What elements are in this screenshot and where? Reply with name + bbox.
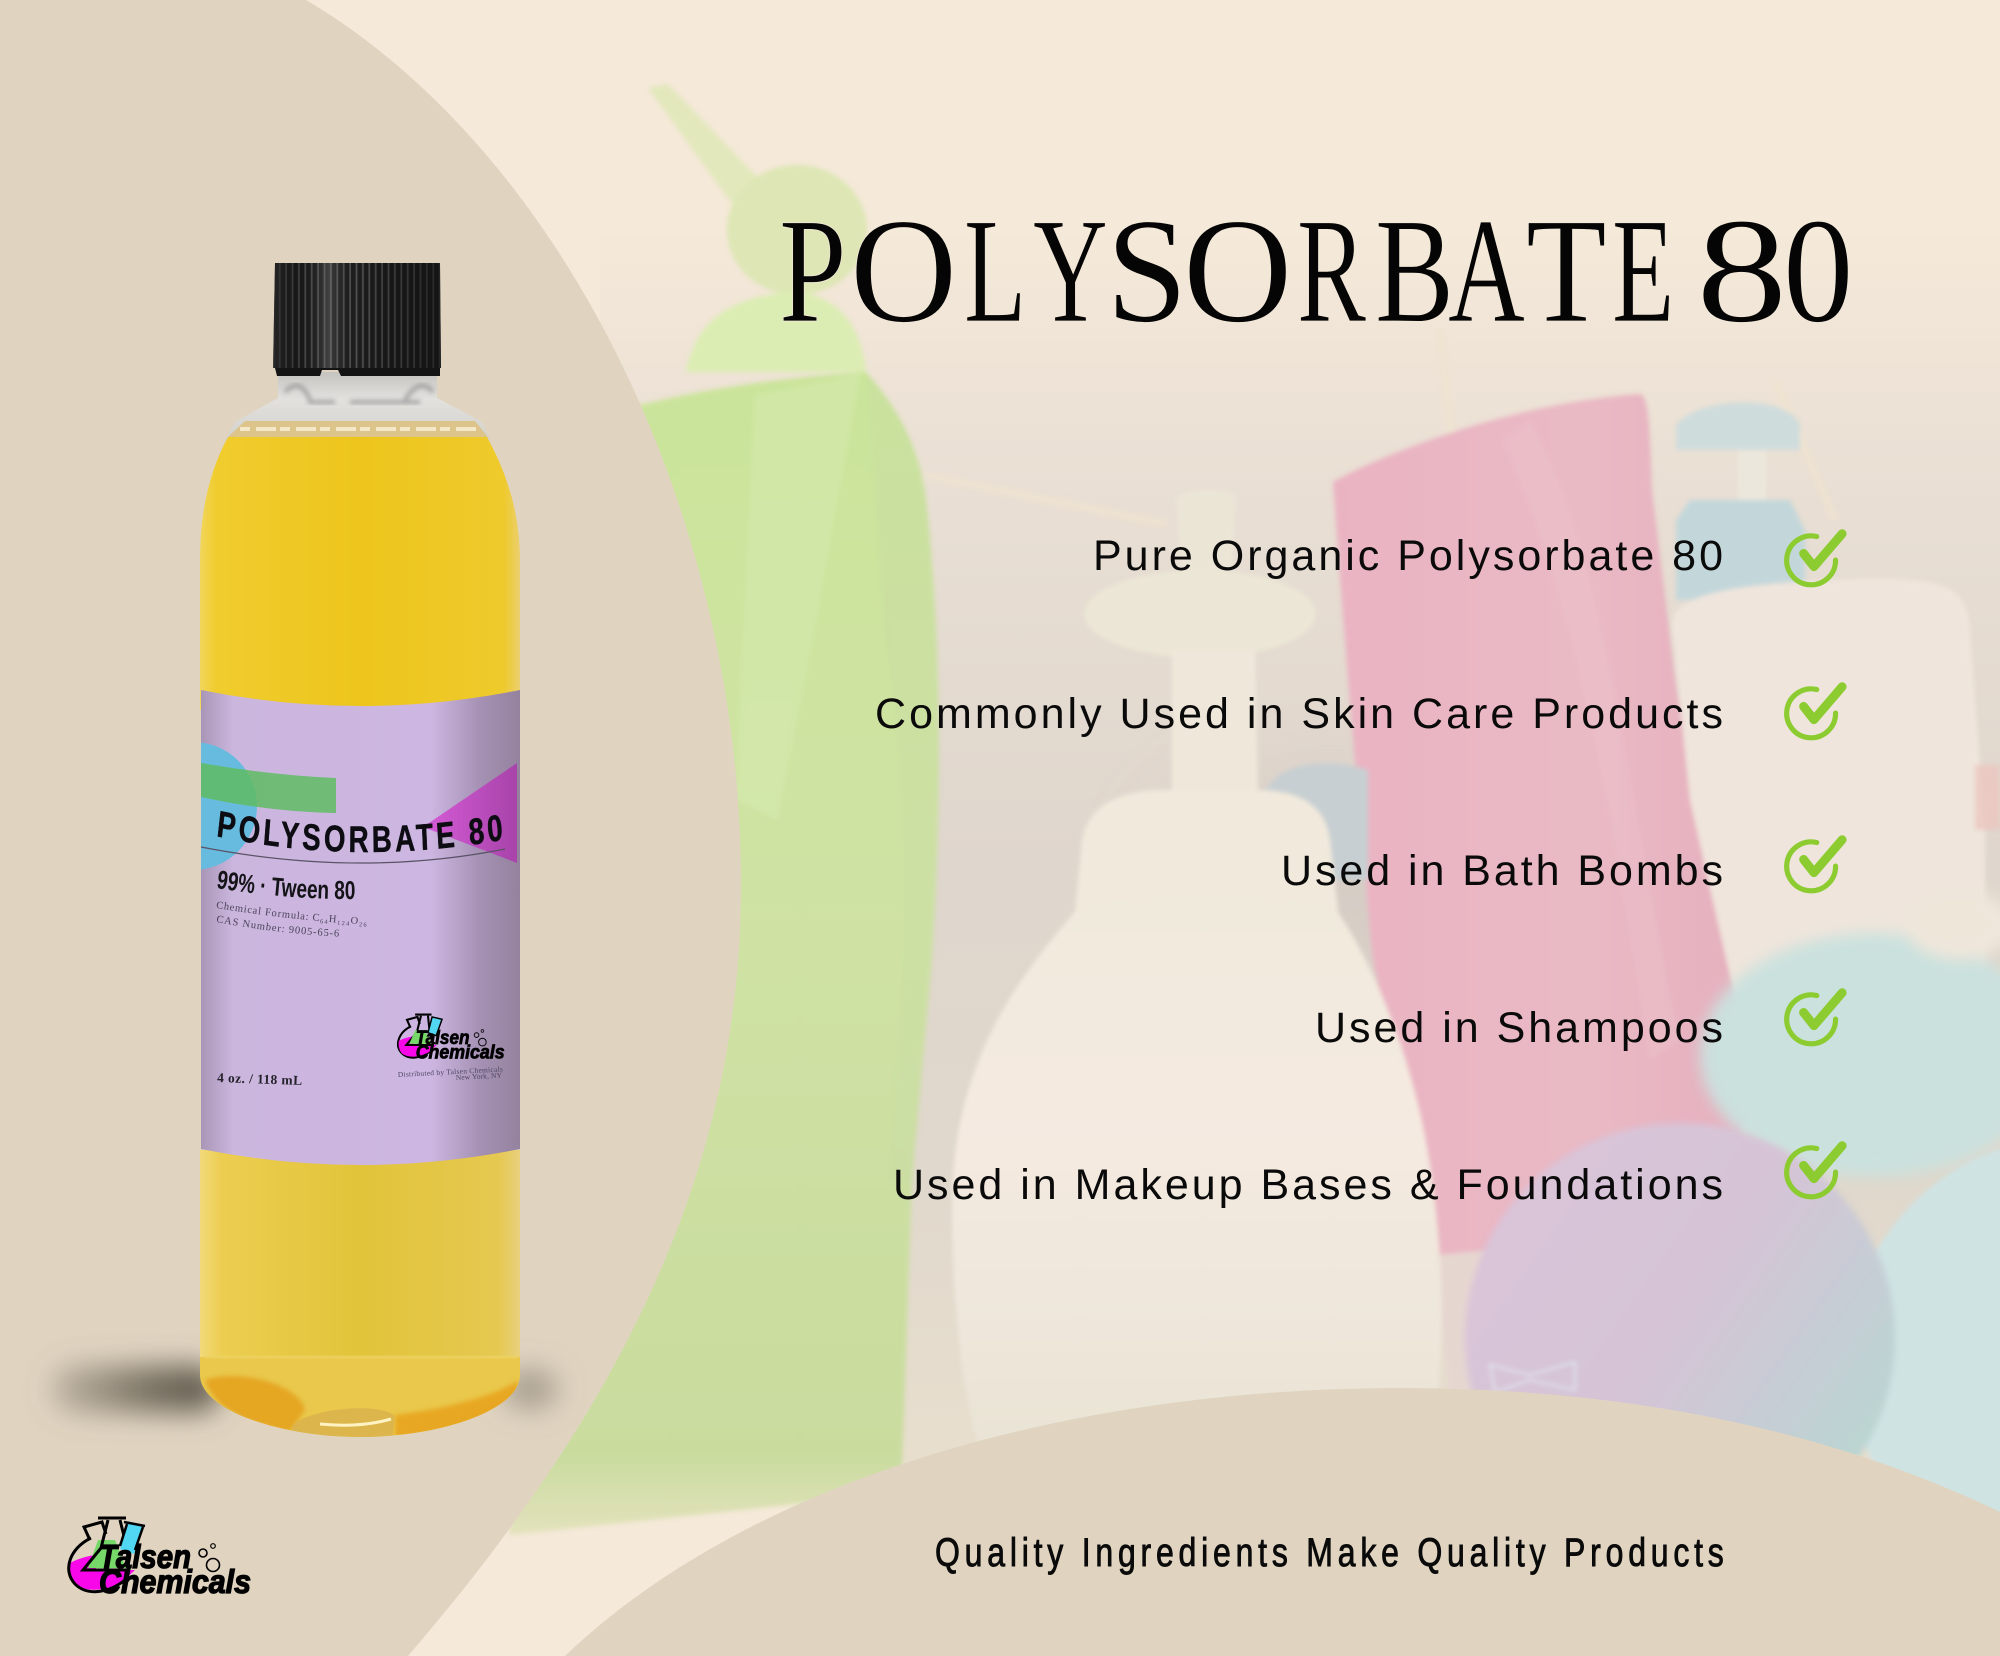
title: B xyxy=(1375,188,1454,354)
label location: New York, NY xyxy=(456,1071,503,1082)
logo text: Chemicals: Chemicals xyxy=(99,1563,251,1600)
label name: POLYSORBATE 80 xyxy=(218,810,502,852)
title: L xyxy=(964,188,1026,354)
title xyxy=(779,188,1854,354)
logo: Talsen Chemicals xyxy=(69,1518,251,1600)
title: R xyxy=(1297,188,1366,354)
label distributor: Distributed by Talsen Chemicals xyxy=(398,1065,503,1079)
glass neck and shoulder xyxy=(225,372,490,440)
icon: check 5 xyxy=(1787,1146,1842,1197)
label small logo xyxy=(398,1015,505,1063)
label band xyxy=(201,763,336,813)
wall tile lines xyxy=(924,330,1835,524)
label small logo: Talsen xyxy=(416,1028,470,1049)
icon: flasks xyxy=(69,1518,145,1592)
title: 8 xyxy=(1696,188,1788,354)
title: T xyxy=(1526,188,1607,354)
panel: left beige arc xyxy=(0,0,741,1656)
panel: bottom beige arc xyxy=(565,1388,2000,1656)
logo text: Talsen: Talsen xyxy=(99,1538,191,1575)
title: O xyxy=(850,188,957,354)
product bottle xyxy=(42,263,568,1437)
label small logo: Chemicals xyxy=(416,1042,505,1063)
title: Y xyxy=(1033,188,1108,354)
grey tile wall xyxy=(600,230,2000,1490)
green bottle xyxy=(420,84,939,1535)
benefit text 3: Used in Bath Bombs xyxy=(1281,847,1723,895)
title: 0 xyxy=(1783,188,1854,354)
black ribbed cap xyxy=(273,263,441,376)
label circle xyxy=(201,742,257,870)
title: A xyxy=(1448,188,1525,354)
icon: check 3 xyxy=(1787,840,1842,891)
bowl below pink bottle xyxy=(1436,1230,1700,1400)
bottle shadow xyxy=(50,1366,558,1412)
pink bottle xyxy=(1333,394,1755,1270)
right cream bottle xyxy=(1672,578,1985,1020)
icon: check 4 xyxy=(1787,993,1842,1044)
title: P xyxy=(779,188,847,354)
label xyxy=(200,690,520,1165)
icon: check 1 xyxy=(1787,534,1842,585)
foam line at liquid top xyxy=(228,421,488,437)
title: O xyxy=(1183,188,1292,354)
liquid body xyxy=(200,430,520,1442)
label triangle xyxy=(423,763,517,863)
label size: 4 oz. / 118 mL xyxy=(217,1070,302,1088)
bottle base xyxy=(200,1357,520,1442)
benefit text 4: Used in Shampoos xyxy=(1315,1004,1723,1052)
benefits list xyxy=(875,532,1842,1209)
blue pump bottle behind xyxy=(1676,402,1805,600)
foam pump bottle xyxy=(952,489,1442,1480)
blue cap behind foam bottle xyxy=(1262,763,1368,880)
icon: bubbles xyxy=(199,1544,220,1572)
label cas: CAS Number: 9005-65-6 xyxy=(217,916,339,937)
tagline: Quality Ingredients Make Quality Products xyxy=(935,1530,1724,1575)
title: E xyxy=(1612,188,1674,354)
teal bath bomb xyxy=(1848,1138,2000,1582)
purple bath bomb xyxy=(1465,1123,1895,1553)
title: S xyxy=(1106,188,1188,354)
benefit text 2: Commonly Used in Skin Care Products xyxy=(875,690,1723,738)
benefit text 1: Pure Organic Polysorbate 80 xyxy=(1093,532,1723,580)
blue sponge xyxy=(1700,891,2000,1177)
label formula: Chemical Formula: C₆₄H₁₂₄O₂₆ xyxy=(216,902,366,927)
icon: check 2 xyxy=(1787,687,1842,738)
benefit text 5: Used in Makeup Bases & Foundations xyxy=(893,1161,1723,1209)
label purity: 99% · Tween 80 xyxy=(218,870,355,900)
